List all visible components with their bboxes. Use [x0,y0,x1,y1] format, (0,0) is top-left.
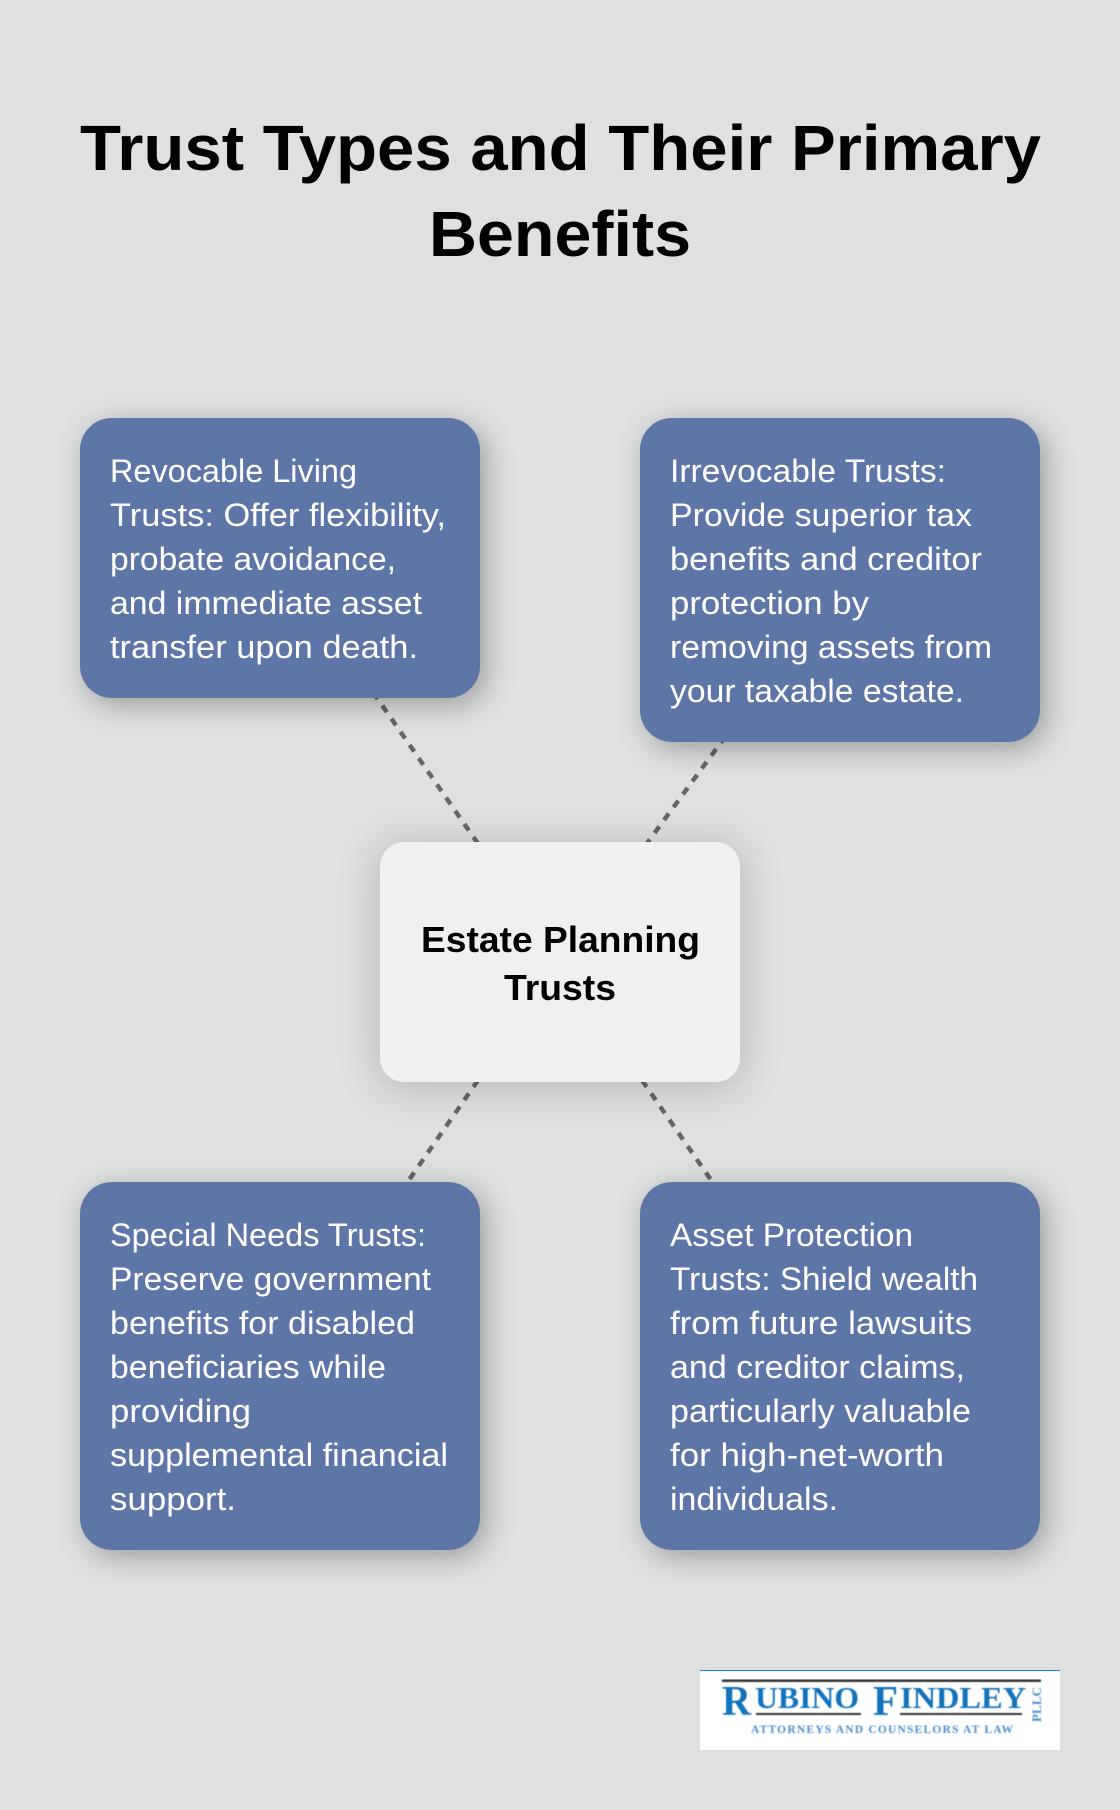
panel: revocable living trusts [80,418,480,698]
revocable living trusts text [110,453,446,665]
panel: special needs trusts [80,1182,480,1550]
special needs trusts text: Special Needs Trusts: [110,1217,426,1253]
special needs trusts text: support. [110,1481,236,1517]
logo: Rubino Findley: PLLC [1029,1687,1044,1722]
irrevocable trusts text: protection by [670,585,869,621]
logo: Rubino Findley: UBINO [755,1680,859,1715]
asset protection trusts text: Asset Protection [670,1217,913,1253]
title: Trust Types and Their Primary [80,112,1041,184]
panel: irrevocable trusts [640,418,1040,742]
special needs trusts text: Preserve government [110,1261,431,1297]
special needs trusts text: providing [110,1393,251,1429]
central node label [421,919,700,1008]
asset protection trusts text: individuals. [670,1481,838,1517]
panel: central node [380,842,740,1082]
asset protection trusts text: Trusts: Shield wealth [670,1261,978,1297]
irrevocable trusts text: your taxable estate. [670,673,964,709]
revocable living trusts text: probate avoidance, [110,541,396,577]
revocable living trusts text: Revocable Living [110,453,357,489]
asset protection trusts text: for high-net-worth [670,1437,944,1473]
asset protection trusts text: and creditor claims, [670,1349,965,1385]
special needs trusts text: beneficiaries while [110,1349,386,1385]
irrevocable trusts text: Provide superior tax [670,497,972,533]
logo: Rubino Findley: ATTORNEYS AND COUNSELORS AT LAW [751,1724,1014,1736]
central node label: Estate Planning [421,919,700,960]
asset protection trusts text: from future lawsuits [670,1305,972,1341]
panel: asset protection trusts [640,1182,1040,1550]
asset protection trusts text [670,1217,978,1517]
irrevocable trusts text: removing assets from [670,629,992,665]
irrevocable trusts text: benefits and creditor [670,541,982,577]
special needs trusts text: benefits for disabled [110,1305,415,1341]
revocable living trusts text: and immediate asset [110,585,422,621]
revocable living trusts text: Trusts: Offer flexibility, [110,497,446,533]
irrevocable trusts text: Irrevocable Trusts: [670,453,946,489]
special needs trusts text [110,1217,448,1517]
logo: Rubino Findley [700,1670,1060,1750]
logo: Rubino Findley: INDLEY [900,1680,1026,1715]
asset protection trusts text: particularly valuable [670,1393,971,1429]
revocable living trusts text: transfer upon death. [110,629,418,665]
title [80,112,1041,270]
irrevocable trusts text [670,453,992,709]
logo: Rubino Findley: F [873,1679,898,1725]
central node label: Trusts [504,967,616,1008]
title: Benefits [429,198,691,270]
logo: Rubino Findley: R [722,1679,752,1725]
special needs trusts text: supplemental financial [110,1437,448,1473]
connector lines [280,558,840,1366]
